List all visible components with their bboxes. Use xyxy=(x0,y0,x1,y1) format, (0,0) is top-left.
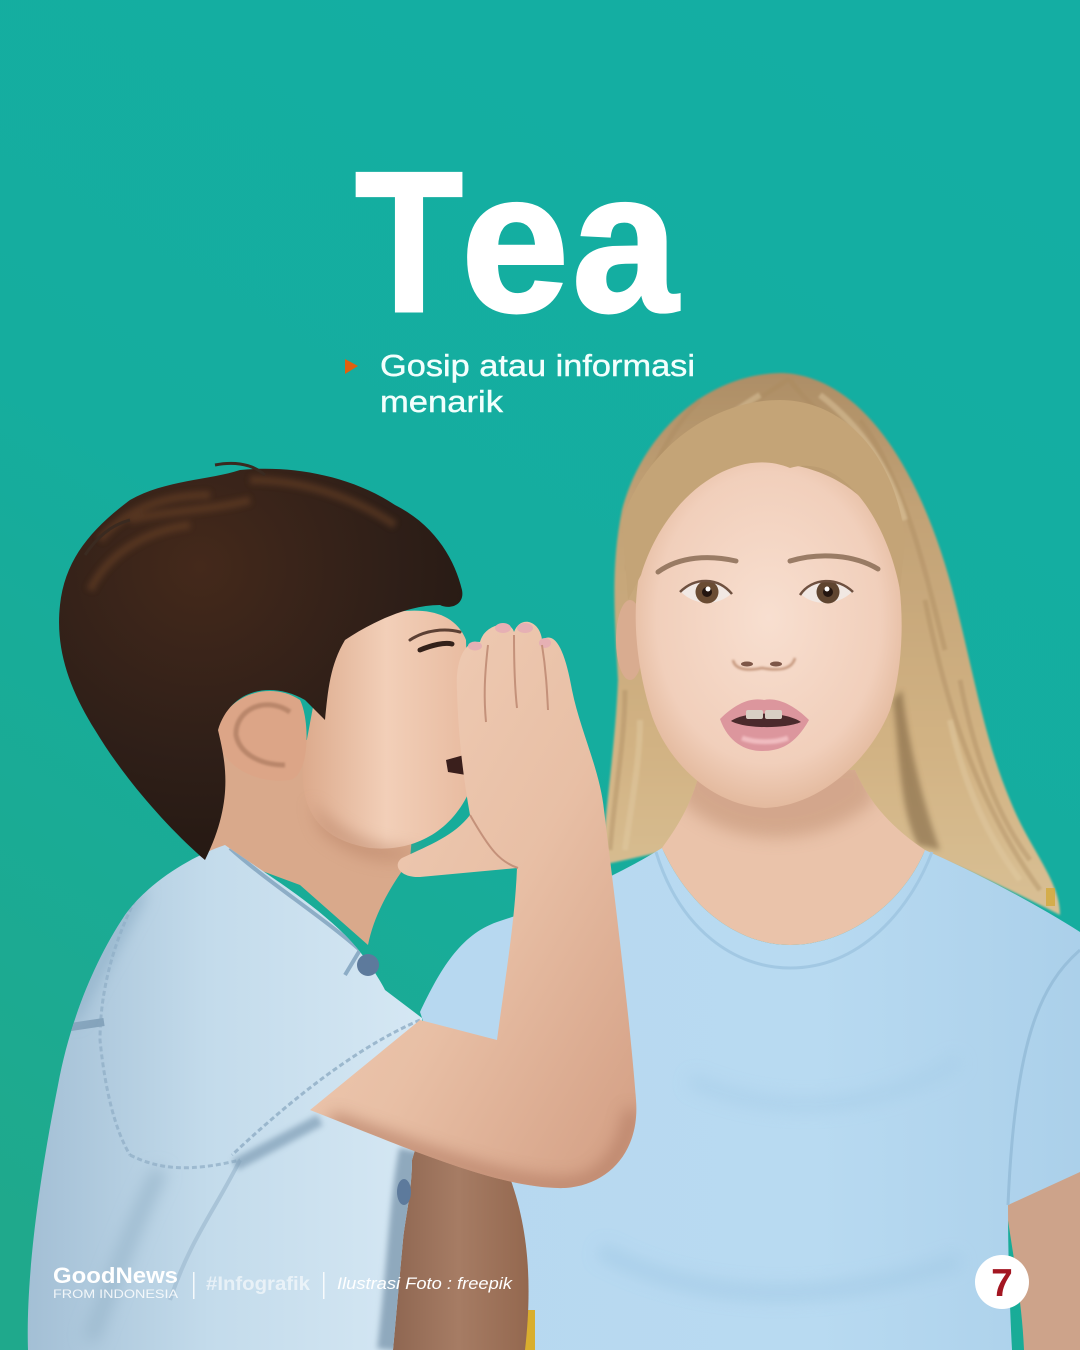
subtitle text: menarik xyxy=(380,384,504,419)
boy neck xyxy=(205,740,420,945)
boy eye and brow xyxy=(410,630,460,650)
page number badge: 7 xyxy=(991,1262,1013,1305)
boy hair xyxy=(59,463,462,860)
girl hair shadow beside neck xyxy=(893,690,940,850)
photo credit: Ilustrasi Foto : freepik xyxy=(337,1274,514,1293)
boy jaw shadow xyxy=(310,800,420,860)
subtitle text: Gosip atau informasi xyxy=(380,348,695,383)
photo: girl xyxy=(388,373,1080,1350)
boy denim shirt xyxy=(28,845,430,1350)
subtitle with bullet xyxy=(345,348,695,419)
neck shadow xyxy=(680,760,875,838)
boy shirt buttons xyxy=(357,954,411,1205)
girl left arm xyxy=(388,1150,529,1350)
title: a xyxy=(572,131,680,354)
title: e xyxy=(461,131,569,354)
girl face xyxy=(636,462,902,808)
boy shirt details xyxy=(64,848,420,1350)
logo: GoodNews: FROM INDONESIA xyxy=(53,1287,178,1301)
girl collar and shirt folds xyxy=(600,852,1080,1293)
boy ear xyxy=(218,691,307,781)
boy arm and cupped hand xyxy=(310,622,636,1188)
hashtag: #Infografik xyxy=(206,1274,310,1295)
girl mouth xyxy=(720,699,809,751)
boy face xyxy=(303,611,470,849)
girl eyes xyxy=(680,580,853,604)
girl eyebrows xyxy=(658,556,878,572)
icon: orange triangle bullet xyxy=(345,359,358,374)
girl t-shirt xyxy=(420,848,1080,1350)
girl nose xyxy=(733,658,795,669)
finger nails xyxy=(468,623,551,650)
stray orange spot xyxy=(1046,888,1055,906)
page number badge xyxy=(975,1255,1029,1309)
photo: boy xyxy=(28,463,1055,1350)
finger separations xyxy=(470,635,548,868)
footer xyxy=(53,1263,514,1301)
yellow sliver beside arm xyxy=(524,1310,535,1350)
girl right arm xyxy=(1005,1170,1080,1350)
girl hair fringe xyxy=(622,400,905,600)
girl neck xyxy=(662,770,925,945)
arm shading xyxy=(330,1110,633,1186)
boy mouth xyxy=(446,755,466,775)
girl ear xyxy=(616,600,644,680)
girl hair xyxy=(602,373,1060,915)
logo: GoodNews: GoodNews xyxy=(53,1263,178,1288)
title: T xyxy=(355,131,463,354)
logo: GoodNews xyxy=(53,1263,178,1301)
